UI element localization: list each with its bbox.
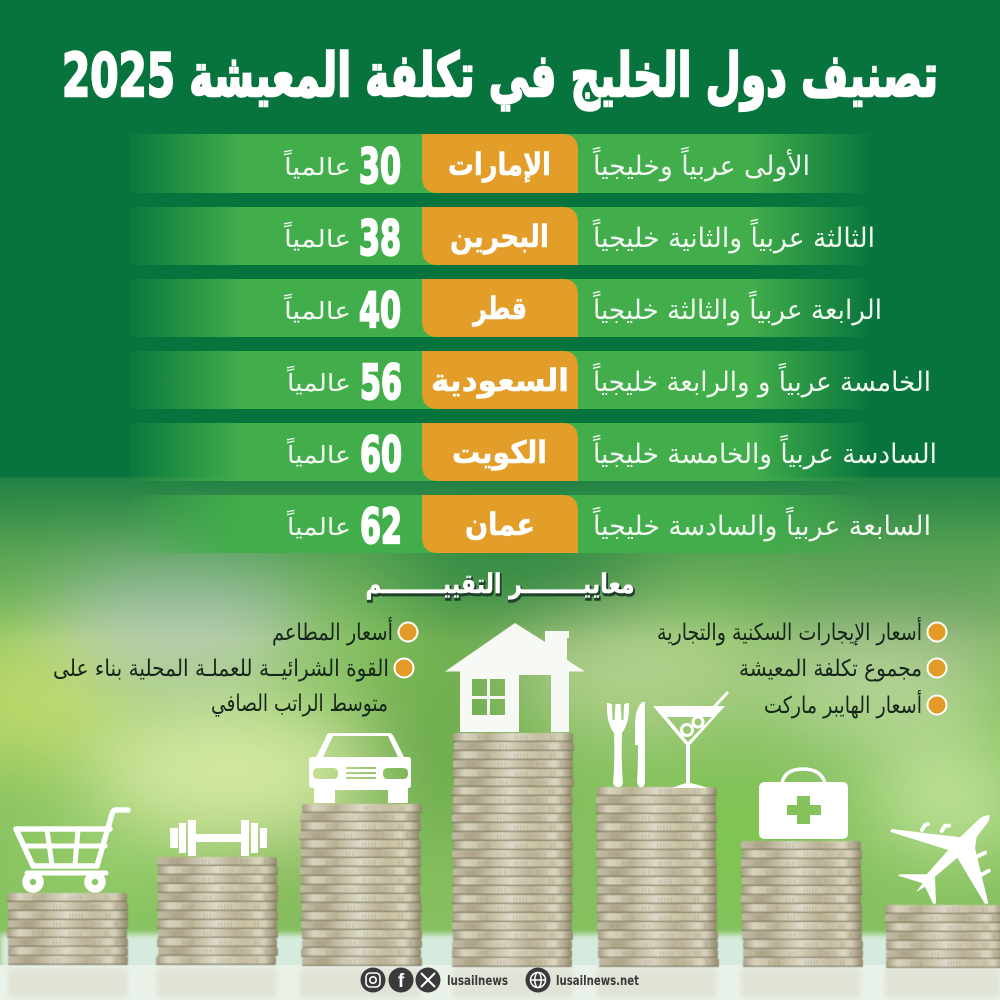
ranking row: UAE: الأولى عربياً وخليجياً (592, 146, 810, 182)
ranking row: Qatar: 40 (359, 283, 401, 339)
ranking row: UAE (130, 134, 870, 195)
icon: dumbbell (170, 820, 267, 856)
icon: globe (526, 968, 550, 992)
icon: car (309, 733, 411, 803)
footer: social media handles (360, 968, 508, 992)
criteria list: left column: متوسط الراتب الصافي (211, 691, 388, 717)
ranking row: Kuwait: 60 (360, 427, 402, 483)
ranking row: Saudi Arabia: الخامسة عربياً و والرابعة خليجياً (592, 362, 931, 398)
criteria heading: معاييــــــــر التقييــــــــم (366, 569, 634, 600)
icon: medical kit (759, 769, 848, 839)
criteria list: right column (657, 617, 946, 719)
criteria list: left column (53, 617, 418, 717)
coin stack 4 (452, 733, 574, 967)
ranking row: UAE: عالمياً (283, 150, 351, 181)
ranking row: Oman (130, 495, 931, 555)
ranking row: Saudi Arabia: السعودية (431, 363, 569, 399)
coin reflections on table (8, 968, 1000, 998)
icon: facebook (388, 968, 414, 992)
coin stack 3 (299, 804, 422, 966)
ranking row: Kuwait (130, 423, 937, 483)
icon: airplane (890, 815, 990, 904)
coin stack 5 (596, 787, 719, 967)
ranking row: Bahrain: البحرين (450, 219, 549, 255)
icon: house (445, 623, 585, 732)
icon: cutlery and cocktail (607, 691, 729, 788)
ranking row: Qatar: الرابعة عربياً والثالثة خليجياً (592, 290, 882, 326)
criteria list: right column: أسعار الهايبر ماركت (764, 690, 922, 719)
icon: instagram (360, 968, 386, 992)
ranking row: Bahrain (130, 207, 875, 267)
ranking row: Oman: 62 (360, 499, 402, 555)
icon: shopping cart (16, 810, 128, 889)
coin stack 2 (156, 857, 278, 965)
footer: social media handles: lusailnews (447, 974, 508, 989)
coin stack 6 (741, 841, 863, 967)
ranking row: Bahrain: عالمياً (283, 222, 351, 253)
ranking row: Saudi Arabia: 56 (360, 355, 402, 411)
icon: X (416, 968, 440, 992)
ranking row: Oman: عالمياً (286, 510, 351, 541)
criteria heading: معاييــــــــر التقييــــــــم (366, 571, 636, 602)
ranking row: UAE: الإمارات (448, 147, 551, 183)
ranking row: Oman: السابعة عربياً والسادسة خليجياً (592, 506, 931, 542)
criteria list: left column: القوة الشرائيــة للعملـة المحلية بناء على (53, 656, 389, 682)
ranking row: Saudi Arabia: عالمياً (286, 366, 351, 397)
icon: facebook: f (398, 971, 405, 992)
ranking row: Qatar: عالمياً (283, 294, 351, 325)
footer: website: lusailnews.net (556, 974, 639, 989)
criteria list: right column: مجموع تكلفة المعيشة (739, 656, 922, 682)
ranking row: Bahrain: الثالثة عربياً والثانية خليجياً (592, 218, 875, 254)
ranking row: Qatar (130, 279, 882, 339)
ranking row: Saudi Arabia (130, 351, 931, 411)
footer: website (526, 968, 639, 992)
coin stack 1 (7, 893, 128, 965)
ranking row: UAE: 30 (359, 139, 401, 195)
criteria list: left column: أسعار المطاعم (272, 617, 393, 646)
ranking row: Kuwait: عالمياً (286, 438, 351, 469)
ranking row: Kuwait: السادسة عربياً والخامسة خليجياً (592, 434, 937, 470)
coin stack 7 (885, 905, 1000, 968)
ranking row: Kuwait: الكويت (452, 435, 547, 471)
criteria list: right column: أسعار الإيجارات السكنية والتجارية (657, 617, 922, 646)
top green overlay (0, 0, 1000, 640)
ranking row: Oman: عمان (465, 507, 535, 543)
ranking row: Qatar: قطر (471, 291, 527, 327)
ranking row: Bahrain: 38 (359, 211, 401, 267)
